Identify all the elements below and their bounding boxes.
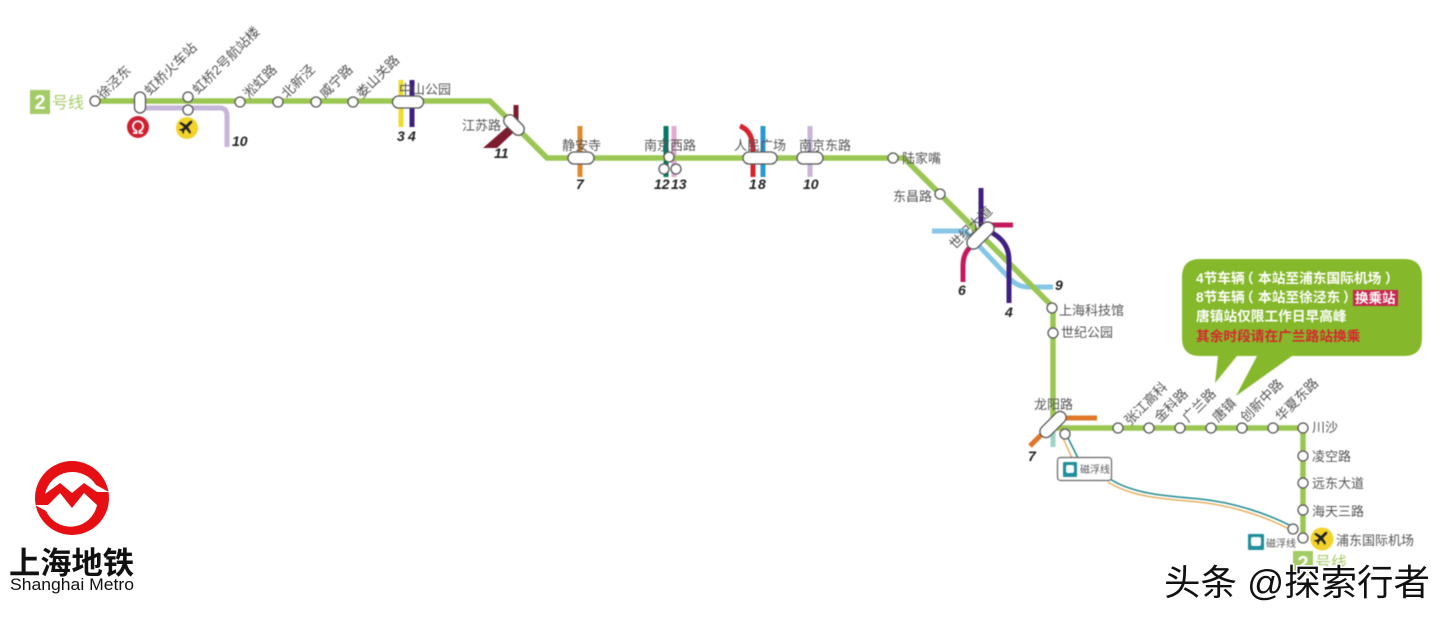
Shanghai Science and Technology Museum <box>1047 303 1057 313</box>
Guanglan Road label: 广兰路 <box>1180 386 1219 425</box>
Chuangxin Middle Road <box>1237 423 1247 433</box>
number 7 Longyang: 7 <box>1028 448 1037 464</box>
Jinke Road label: 金科路 <box>1152 386 1191 425</box>
number 10 Hongqiao: 10 <box>232 133 248 149</box>
Xujing East <box>90 96 100 106</box>
maglev box at Longyang: 磁浮线 <box>1080 463 1110 476</box>
rotated station names <box>95 24 1322 428</box>
Weining Road <box>311 97 321 107</box>
East Nanjing Road label: 南京东路 <box>799 138 851 153</box>
West Nanjing Road label: 南京西路 <box>644 138 696 153</box>
Lingkong Road <box>1298 451 1308 461</box>
Xujing East label: 徐泾东 <box>95 63 134 102</box>
icon: Hongqiao airport <box>176 117 198 139</box>
line 4 over line 2 <box>981 188 1009 303</box>
Huaxia East Road label: 华夏东路 <box>1273 375 1322 424</box>
callout line 1: （ <box>1240 271 1254 286</box>
Jiangsu Road <box>501 112 527 138</box>
line numbers <box>232 128 1063 464</box>
horizontal station names <box>399 82 1414 548</box>
Century Park <box>1048 328 1058 338</box>
line 2 badge bottom: 号线 <box>1315 554 1347 572</box>
Science Museum label: 上海科技馆 <box>1059 303 1124 318</box>
line 6 <box>963 225 1013 282</box>
callout line 1: ） <box>1385 271 1399 286</box>
callout line 3: 唐镇站仅限工作日早高峰 <box>1196 308 1347 324</box>
Lingkong Road label: 凌空路 <box>1312 449 1351 464</box>
line 7 <box>1030 418 1097 446</box>
interchange lines <box>140 80 1053 287</box>
Huaxia East Road <box>1268 423 1278 433</box>
Pudong Airport label: 浦东国际机场 <box>1336 533 1414 548</box>
line 11 <box>514 105 518 124</box>
Beixinjing label: 北新泾 <box>279 62 318 101</box>
callout: train service notes <box>1182 259 1422 396</box>
line 11 wedge <box>483 127 513 148</box>
line 7 <box>578 126 582 177</box>
Tangzhen label: 唐镇 <box>1209 395 1239 425</box>
Haitiansan Road label: 海天三路 <box>1312 504 1364 519</box>
line 10 <box>808 126 812 177</box>
callout line 1: 4节车辆 <box>1196 270 1245 286</box>
Dongchang Road label: 东昌路 <box>893 189 932 204</box>
Lujiazui label: 陆家嘴 <box>902 151 941 166</box>
Haitiansan Road <box>1298 505 1308 515</box>
Longyang Road label: 龙阳路 <box>1034 397 1073 412</box>
icon: Pudong airport <box>1310 528 1334 550</box>
Chuangxin Middle Road label: 创新中路 <box>1238 376 1287 425</box>
Yuandong Avenue label: 远东大道 <box>1312 476 1364 491</box>
icon: railway station <box>127 116 149 138</box>
Chuansha label: 川沙 <box>1312 420 1338 435</box>
number 4: 4 <box>407 128 416 144</box>
line 9 <box>932 231 1053 287</box>
number 4 Century Avenue: 4 <box>1004 304 1013 320</box>
line 2 badge top left: 号线 <box>52 94 84 112</box>
Hongqiao T2 label: 虹桥2号航站楼 <box>190 24 263 97</box>
Century Park label: 世纪公园 <box>1061 325 1113 340</box>
logo English name: Shanghai Metro <box>10 575 134 594</box>
number 3: 3 <box>397 128 405 144</box>
icon: maglev train <box>1063 462 1077 477</box>
Century Avenue <box>964 219 997 252</box>
line 1 <box>740 126 753 177</box>
Jing'an Temple label: 静安寺 <box>562 138 601 153</box>
line 8 <box>760 126 766 177</box>
line 2 badge bottom: 2 <box>1297 553 1309 575</box>
callout line 1: 本站至浦东国际机场 <box>1258 270 1382 286</box>
Guanglan Road <box>1175 423 1185 433</box>
Jing'an Temple <box>568 152 594 164</box>
number 1: 1 <box>749 176 757 192</box>
Hongqiao Railway Station <box>134 92 146 113</box>
Pudong Airport <box>1288 524 1308 543</box>
Hongqiao T2 <box>183 92 193 115</box>
maglev label at Pudong <box>1248 534 1296 550</box>
maglev label at Pudong: 磁浮线 <box>1266 537 1296 550</box>
station markers <box>90 92 1308 543</box>
callout line 4: 其余时段请在广兰路站换乘 <box>1196 328 1361 344</box>
People's Square label: 人民广场 <box>734 138 786 153</box>
number 11: 11 <box>494 145 509 161</box>
Songhong Road <box>235 97 245 107</box>
logo emblem <box>35 461 109 535</box>
Zhangjiang Hi-Tech label: 张江高科 <box>1121 378 1171 428</box>
maglev box at Longyang <box>1058 458 1112 480</box>
callout line 2: ） <box>1343 290 1357 305</box>
Hongqiao Railway Station label: 虹桥火车站 <box>141 39 200 98</box>
Weining Road label: 威宁路 <box>316 61 356 101</box>
Dongchang Road <box>935 189 945 199</box>
Tangzhen <box>1206 423 1216 433</box>
line 4 <box>410 80 414 127</box>
maglev orange rail <box>1063 438 1291 530</box>
Century Avenue label: 世纪大道 <box>947 203 995 252</box>
number 10: 10 <box>803 176 819 192</box>
maglev teal rail <box>1068 438 1293 527</box>
logo Chinese name: 上海地铁 <box>9 546 134 581</box>
Loushanguan Road <box>348 97 358 107</box>
Lujiazui <box>888 153 898 163</box>
line 12 <box>664 126 668 177</box>
callout line 2: （ <box>1240 290 1254 305</box>
People's Square <box>743 152 777 164</box>
Loushanguan Road label: 娄山关路 <box>354 52 403 101</box>
Longyang Road <box>1037 409 1070 440</box>
transfer station tag: 换乘站 <box>1355 290 1396 306</box>
Jiangsu Road label: 江苏路 <box>462 118 501 133</box>
line 16 stub <box>1050 430 1056 447</box>
Zhongshan Park label: 中山公园 <box>399 82 451 97</box>
line 13 <box>672 126 676 177</box>
number 6: 6 <box>958 282 966 298</box>
Beixinjing <box>273 97 283 107</box>
Longyang Road lines <box>1030 418 1097 447</box>
number 7: 7 <box>576 176 585 192</box>
line 2 badge bottom <box>1293 551 1347 575</box>
Zhangjiang Hi-Tech <box>1113 423 1123 433</box>
East Nanjing Road <box>797 152 823 164</box>
Zhongshan Park <box>392 96 424 108</box>
Shanghai Metro logo <box>9 461 134 594</box>
line 2 badge top left: 2 <box>34 92 46 114</box>
line 10 branch at Hongqiao <box>140 108 227 147</box>
number 13: 13 <box>671 176 687 192</box>
line 2 badge top left <box>30 90 84 114</box>
line 2 main route <box>95 101 1303 538</box>
Songhong Road label: 淞虹路 <box>241 62 280 101</box>
callout line 2: 8节车辆 <box>1196 289 1245 305</box>
Yuandong Avenue <box>1298 478 1308 488</box>
Chuansha <box>1298 423 1308 433</box>
Jinke Road <box>1144 423 1154 433</box>
number 12: 12 <box>654 176 670 192</box>
West Nanjing Road <box>659 152 681 174</box>
watermark: 头条 @探索行者 <box>1164 562 1430 603</box>
callout line 2: 本站至徐泾东 <box>1258 289 1340 305</box>
line 3 <box>398 80 404 127</box>
maglev track <box>1063 438 1293 530</box>
number 8: 8 <box>758 176 766 192</box>
number 9: 9 <box>1055 277 1063 293</box>
